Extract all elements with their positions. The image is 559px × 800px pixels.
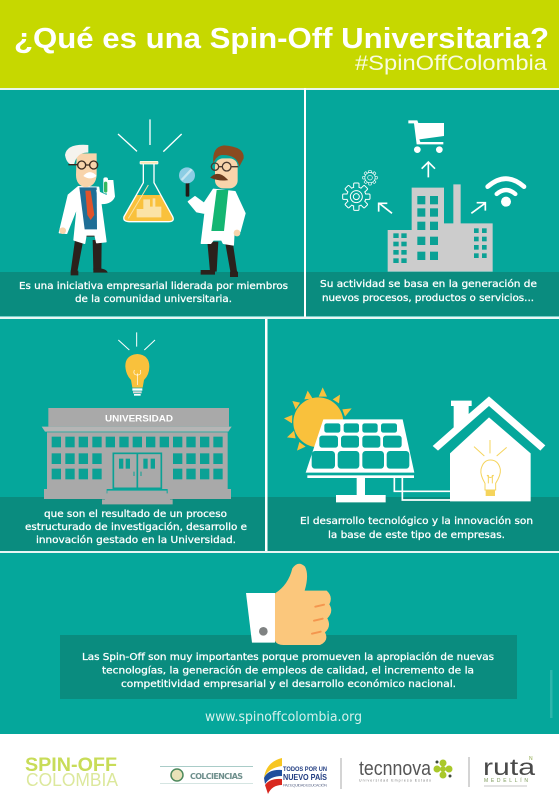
- logo: Ruta N Medellín: [483, 754, 535, 786]
- panel: iniciativa empresarial: [0, 119, 304, 316]
- icon: rays: [118, 119, 182, 152]
- scientists and flask illustration: [59, 119, 245, 277]
- caption text: [19, 281, 288, 305]
- caption text: nuevos procesos, productos o servicios...: [322, 293, 534, 304]
- caption text: innovación gestado en la Universidad.: [36, 534, 236, 546]
- icon: house: [433, 396, 545, 501]
- character: older scientist: [59, 145, 115, 275]
- caption band: [60, 635, 517, 699]
- logo: Todos por un nuevo país: PAZ EQUIDAD EDUCACIÓN: [283, 782, 327, 788]
- solar house illustration: [284, 387, 545, 502]
- icon: small gear: [363, 170, 377, 185]
- icon: solar panel: [306, 419, 450, 502]
- caption band: [306, 272, 559, 316]
- building sign: UNIVERSIDAD: [105, 414, 173, 424]
- header: [0, 0, 559, 88]
- caption text: la base de este tipo de empresas.: [328, 530, 505, 541]
- caption text: Las Spin-Off son muy importantes porque promueven la apropiación de nuevas: [82, 651, 494, 663]
- panel: universidad: [0, 332, 265, 551]
- logo: Spin-Off Colombia: [25, 755, 118, 790]
- caption text: Es una iniciativa empresarial liderada por miembros: [19, 281, 288, 292]
- caption text: El desarrollo tecnológico y la innovación son: [300, 515, 533, 527]
- logo: Spin-Off Colombia: SPIN-OFF: [25, 755, 117, 776]
- logo: Ruta N Medellín: N: [529, 756, 533, 762]
- logo: Todos por un nuevo país: [264, 758, 327, 794]
- icon: university building: [42, 408, 232, 504]
- caption band: [0, 497, 265, 551]
- footer logos: [25, 754, 535, 794]
- icon: sun: [284, 387, 352, 451]
- logo: Colciencias: COLCIENCIAS: [190, 772, 243, 781]
- caption text: que son el resultado de un proceso: [44, 509, 227, 520]
- title: ¿Qué es una Spin-Off Universitaria?: [14, 23, 549, 55]
- icon: thumbs up: [246, 564, 331, 645]
- icon: large gear: [343, 183, 370, 210]
- icon: shopping cart: [408, 120, 444, 153]
- panel: importancia: [60, 564, 517, 725]
- logo: Colciencias: [160, 766, 253, 784]
- caption text: [320, 278, 537, 304]
- caption text: Su actividad se basa en la generación de: [320, 278, 537, 290]
- character: younger scientist: [179, 145, 245, 277]
- icon: flask: [124, 161, 173, 222]
- hashtag: #SpinOffColombia: [355, 52, 547, 75]
- logo: Ruta N Medellín: MEDELLÍN: [484, 777, 528, 784]
- university illustration: [42, 332, 232, 504]
- logo: Tecnnova: tecnnova: [359, 758, 432, 780]
- icon: arrows: [379, 162, 485, 213]
- icon: factory: [388, 184, 493, 272]
- caption text: competitividad empresarial y el desarrollo económico nacional.: [121, 678, 456, 690]
- logo: Ruta N Medellín: ruta: [483, 754, 535, 780]
- caption text: [300, 515, 533, 541]
- logo: Todos por un nuevo país: TODOS POR UN: [283, 766, 327, 773]
- caption text: estructurado de investigación, desarrollo e: [25, 521, 247, 533]
- factory and outputs illustration: [343, 120, 524, 272]
- logo: Todos por un nuevo país: NUEVO PAÍS: [283, 772, 327, 782]
- caption text: [82, 651, 494, 690]
- caption text: de la comunidad universitaria.: [75, 294, 232, 305]
- logo: Spin-Off Colombia: COLOMBIA: [26, 770, 118, 790]
- panel: actividad: [306, 120, 559, 316]
- caption band: [0, 272, 304, 316]
- icon: lightbulb: [118, 332, 155, 396]
- caption text: tecnologías, la generación de empleos de calidad, el incremento de la: [102, 664, 474, 676]
- panel: desarrollo tecnológico: [268, 387, 559, 551]
- logo: Tecnnova: Universidad Empresa Estado: [359, 778, 431, 782]
- icon: wifi: [488, 179, 524, 207]
- caption band: [268, 497, 559, 551]
- website url: www.spinoffcolombia.org: [205, 710, 362, 725]
- caption text: [25, 509, 247, 546]
